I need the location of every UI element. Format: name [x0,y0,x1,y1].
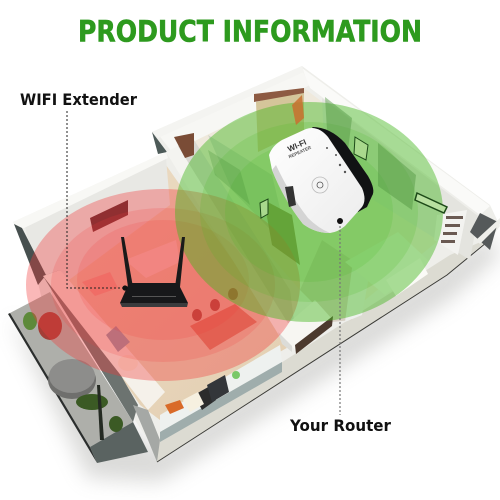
living room wood floor [28,165,292,420]
dining table [190,304,257,350]
router body [120,283,188,303]
label: Your Router: Your Router [289,416,391,435]
floor plan [8,66,500,463]
bathtub [278,300,333,350]
device black back band [312,127,373,212]
green room details [208,95,447,218]
rear window [152,132,167,154]
building base [13,66,500,462]
device wordmark: WI-FI [286,138,308,154]
router antennas [121,237,133,287]
device button [312,177,328,193]
wifi extender device [269,127,373,233]
end wall block [470,213,498,250]
device status lights [326,147,346,173]
rear wall inner faces [25,158,170,300]
living room TV [90,200,128,232]
rug stripes [106,326,130,352]
device wordmark: REPEATER [288,145,313,159]
router [120,237,188,307]
label: WIFI Extender: WIFI Extender [20,90,137,109]
device side shade [272,165,330,233]
divider wall main [166,146,296,350]
outer wall tops [13,152,168,230]
green signal rings [175,102,443,322]
left front wall glass [43,270,138,422]
device wordmark [284,136,313,159]
bookshelf [434,210,467,255]
drop shadow under building [10,235,500,482]
wardrobe [256,90,304,152]
grey pier [133,405,160,462]
door [174,133,194,158]
Your Router leader line [337,218,343,415]
WIFI Extender leader line [67,111,128,291]
left end window [14,224,46,285]
balcony floor [10,292,133,447]
balcony round table [48,361,96,399]
title: PRODUCT INFORMATION [78,14,422,48]
red signal rings [26,189,300,381]
device body [269,128,364,233]
bedroom wing floor [178,85,470,300]
outer slab along the bottom edge [157,238,490,462]
interior room wall [208,135,290,250]
kitchen counter [160,345,282,432]
device port [285,186,296,207]
balcony side face [90,422,148,463]
sofa [125,240,180,278]
bed [345,232,430,295]
balcony plants [23,312,123,432]
left front wall top [43,270,165,410]
